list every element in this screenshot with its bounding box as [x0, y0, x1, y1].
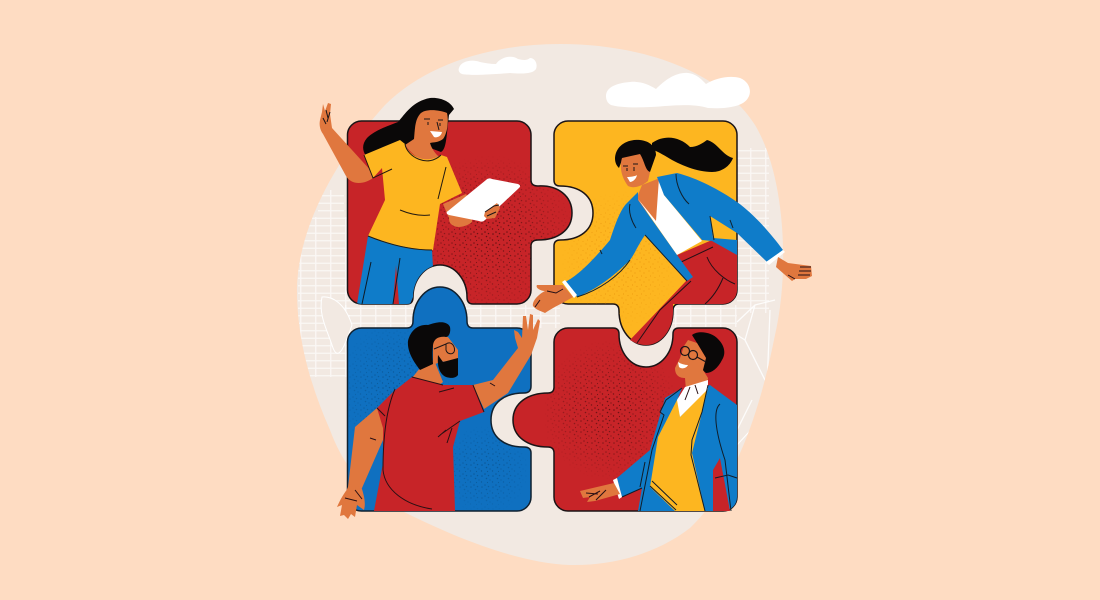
yellow vest: [650, 388, 708, 511]
cuff: [613, 478, 622, 499]
chest: [636, 178, 664, 222]
hair: [692, 332, 724, 373]
blue skirt: [357, 236, 433, 304]
face: [675, 340, 708, 390]
raised arm: [473, 314, 540, 409]
hair: [408, 322, 450, 370]
glasses: [680, 346, 706, 362]
jacket lines: [577, 174, 733, 297]
cuffs: [562, 250, 785, 298]
trouser lines: [637, 247, 735, 343]
left hand: [533, 285, 573, 313]
red trousers: [630, 240, 737, 345]
neck: [412, 360, 443, 386]
cloud left: [459, 57, 537, 75]
skirt folds: [362, 258, 400, 304]
left arm: [344, 408, 385, 496]
background blob: [297, 44, 783, 565]
blazer lines: [622, 385, 737, 511]
finger creases: [323, 110, 330, 124]
person: man with glasses and blue blazer: [580, 332, 737, 511]
ponytail: [652, 138, 733, 172]
right hand: [776, 257, 812, 281]
person: woman in yellow shirt: [320, 98, 520, 304]
glasses: [434, 343, 455, 354]
neck and face: [405, 110, 448, 163]
tablet: [447, 178, 520, 222]
puzzle piece: top right yellow: [554, 121, 737, 345]
shirt lines: [377, 377, 484, 509]
jacket: [657, 173, 783, 262]
collar: [677, 380, 708, 417]
smile: [627, 175, 637, 182]
face: [433, 335, 458, 365]
yellow shirt: [364, 140, 462, 250]
shirt lines: [364, 144, 446, 250]
fingers: [485, 205, 499, 216]
hand lines: [586, 385, 698, 500]
white shirt: [638, 178, 702, 255]
person: woman in blue jacket: [533, 138, 812, 345]
puzzle piece: bottom left blue: [348, 287, 531, 511]
red gap: [713, 458, 730, 511]
left hand: [337, 486, 365, 519]
blue blazer: [617, 385, 737, 511]
smile: [678, 362, 688, 368]
arm details: [345, 383, 495, 501]
puzzle piece: bottom right red: [513, 328, 737, 511]
cloud right: [606, 73, 750, 108]
city map: [298, 148, 775, 445]
person: bearded man in red shirt: [337, 314, 540, 519]
long hair: [363, 98, 454, 156]
finger lines: [535, 267, 811, 307]
skirt stripe: [393, 265, 399, 304]
hand on tablet: [484, 203, 500, 219]
eyes: [424, 119, 443, 130]
far arm: [443, 194, 472, 227]
red shirt: [374, 377, 484, 511]
smile: [430, 131, 442, 137]
head hair: [615, 140, 656, 172]
raised arm: [320, 103, 373, 183]
eyes: [623, 164, 638, 171]
face: [621, 154, 650, 187]
beard: [438, 355, 458, 378]
hand: [580, 483, 620, 502]
puzzle piece: top left red: [348, 121, 580, 310]
